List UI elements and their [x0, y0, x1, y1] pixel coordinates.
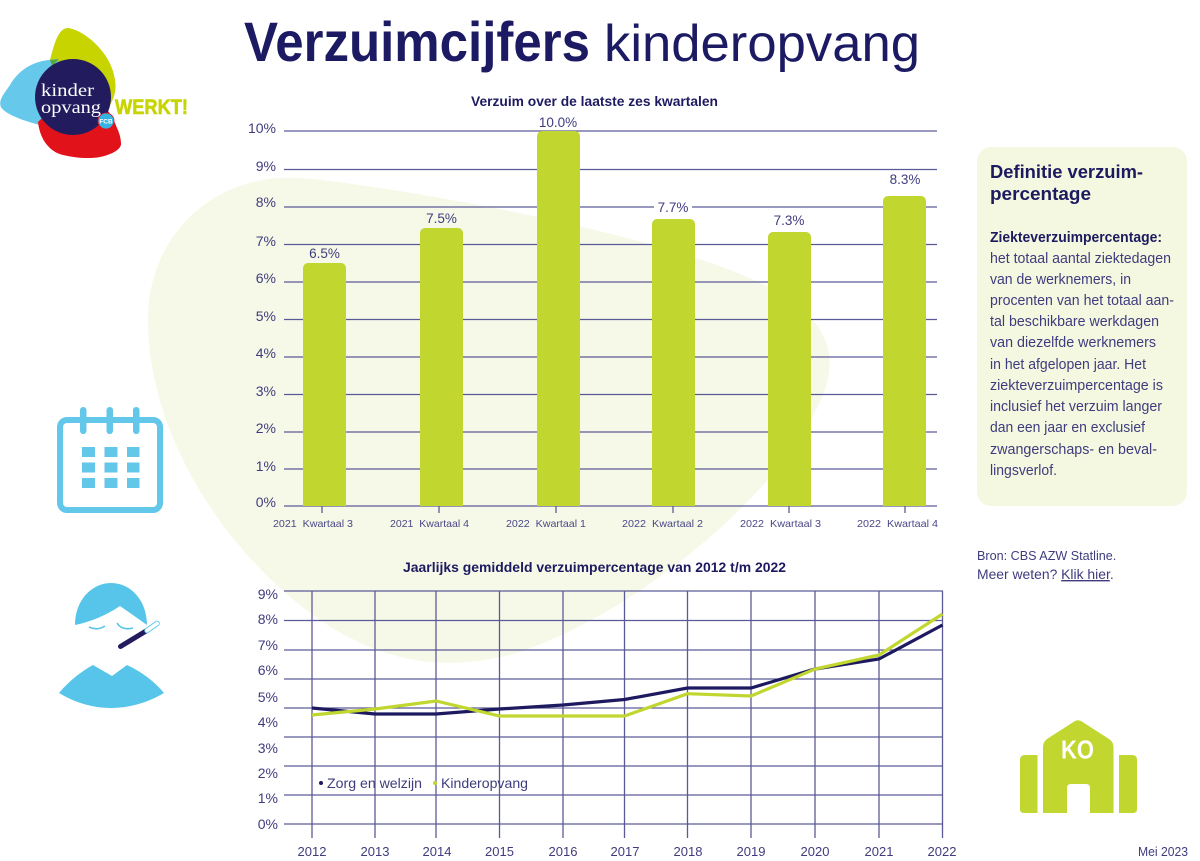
y axis labels: 8%: [256, 194, 276, 210]
logo: kinderopvang werkt: WERKT!: [115, 96, 188, 119]
y axis labels: [258, 586, 278, 832]
logo: kinderopvang werkt: kinder: [41, 80, 94, 100]
y axis labels: 1%: [258, 790, 278, 806]
year labels: 2022: [928, 844, 956, 859]
year labels: 2019: [737, 844, 765, 859]
y axis labels: 0%: [256, 494, 276, 510]
bar chart heading: Verzuim over de laatste zes kwartalen: [471, 94, 718, 109]
y axis labels: 5%: [256, 308, 276, 324]
panel body text: lingsverlof.: [990, 463, 1057, 479]
y axis labels: 9%: [256, 158, 276, 174]
bar value labels: 8.3%: [890, 172, 920, 187]
bar chart: verzuim over de laatste zes kwartalen: [248, 94, 938, 530]
bar value labels: 6.5%: [309, 246, 340, 261]
panel body text: in het afgelopen jaar. Het: [990, 357, 1146, 373]
source note: Meer weten? Klik hier.: [977, 566, 1114, 582]
panel heading: percentage: [990, 184, 1091, 204]
bar value labels: [309, 115, 920, 261]
legend: Kinderopvang: [441, 775, 528, 791]
year labels: 2012: [298, 844, 326, 859]
quarter labels: 2022 Kwartaal 4: [857, 518, 938, 530]
logo: kinderopvang werkt: FCB: [99, 118, 113, 126]
quarter labels: 2022 Kwartaal 2: [622, 518, 703, 530]
bar value labels: 7.5%: [426, 211, 457, 226]
legend: Zorg en welzijn: [327, 775, 422, 791]
icon: KO building: [1020, 720, 1137, 813]
y axis labels: 4%: [258, 714, 278, 730]
quarter labels: 2022 Kwartaal 3: [740, 518, 821, 530]
year labels: [298, 844, 956, 859]
panel body text: zwangerschaps- en beval-: [990, 442, 1157, 458]
panel: definitie verzuimpercentage: [977, 147, 1187, 506]
y axis labels: 5%: [258, 689, 278, 705]
y axis labels: 10%: [248, 120, 276, 136]
panel body text: inclusief het verzuim langer: [990, 399, 1162, 415]
y axis labels: 9%: [258, 586, 278, 602]
bar value labels: 7.7%: [658, 200, 688, 215]
y axis labels: 3%: [256, 383, 276, 399]
logo: kinderopvang werkt: opvang: [41, 97, 101, 117]
bar value labels: 10.0%: [539, 115, 577, 130]
date: Mei 2023: [1138, 845, 1188, 859]
panel body text: ziekteverzuimpercentage is: [990, 378, 1163, 394]
legend: [319, 775, 528, 791]
y axis labels: 7%: [256, 233, 276, 249]
bar value labels: 7.3%: [774, 213, 804, 228]
icon: sick person with thermometer: [59, 583, 164, 708]
title: Verzuimcijfers: [244, 10, 590, 73]
year labels: 2013: [361, 844, 389, 859]
logo: kinderopvang werkt: [0, 28, 188, 158]
panel body text: [990, 230, 1174, 479]
line chart: jaarlijks gemiddeld verzuimpercentage: [258, 560, 956, 859]
panel body text: van de werknemers, in: [990, 272, 1131, 288]
source note: [977, 549, 1116, 582]
title: kinderopvang: [604, 15, 920, 73]
line: zorg en welzijn: [312, 625, 942, 714]
y axis labels: 8%: [258, 611, 278, 627]
line chart heading: Jaarlijks gemiddeld verzuimpercentage van 2012 t/m 2022: [403, 560, 786, 575]
background blob: [148, 178, 830, 663]
year labels: 2015: [485, 844, 514, 859]
year labels: 2014: [423, 844, 451, 859]
y axis labels: [248, 120, 276, 510]
y axis labels: 6%: [258, 662, 278, 678]
y axis labels: 2%: [256, 420, 276, 436]
panel body text: dan een jaar en exclusief: [990, 420, 1146, 436]
panel heading: Definitie verzuim-: [990, 162, 1143, 182]
year labels: 2017: [611, 844, 639, 859]
bars: [303, 131, 926, 506]
source note: Bron: CBS AZW Statline.: [977, 549, 1116, 563]
panel body text: van diezelfde werknemers: [990, 335, 1156, 351]
quarter labels: 2021 Kwartaal 4: [390, 518, 469, 530]
icon: KO building: KO: [1061, 734, 1094, 764]
line: kinderopvang: [312, 614, 942, 716]
y axis labels: 6%: [256, 270, 276, 286]
icon: calendar: [60, 407, 160, 510]
panel body text: tal beschikbare werkdagen: [990, 314, 1159, 330]
year labels: 2020: [801, 844, 829, 859]
year labels: 2021: [865, 844, 893, 859]
y axis labels: 4%: [256, 345, 276, 361]
year labels: 2018: [674, 844, 702, 859]
quarter labels: 2021 Kwartaal 3: [273, 518, 353, 530]
year labels: 2016: [549, 844, 577, 859]
panel body text: Ziekteverzuimpercentage:: [990, 230, 1162, 246]
y axis labels: 0%: [258, 816, 278, 832]
y axis labels: 2%: [258, 765, 278, 781]
panel body text: procenten van het totaal aan-: [990, 293, 1174, 309]
y axis labels: 7%: [258, 637, 278, 653]
y axis labels: 3%: [258, 740, 278, 756]
quarter labels: 2022 Kwartaal 1: [506, 518, 586, 530]
quarter labels: [273, 518, 938, 530]
panel body text: het totaal aantal ziektedagen: [990, 251, 1171, 267]
y axis labels: 1%: [256, 458, 276, 474]
